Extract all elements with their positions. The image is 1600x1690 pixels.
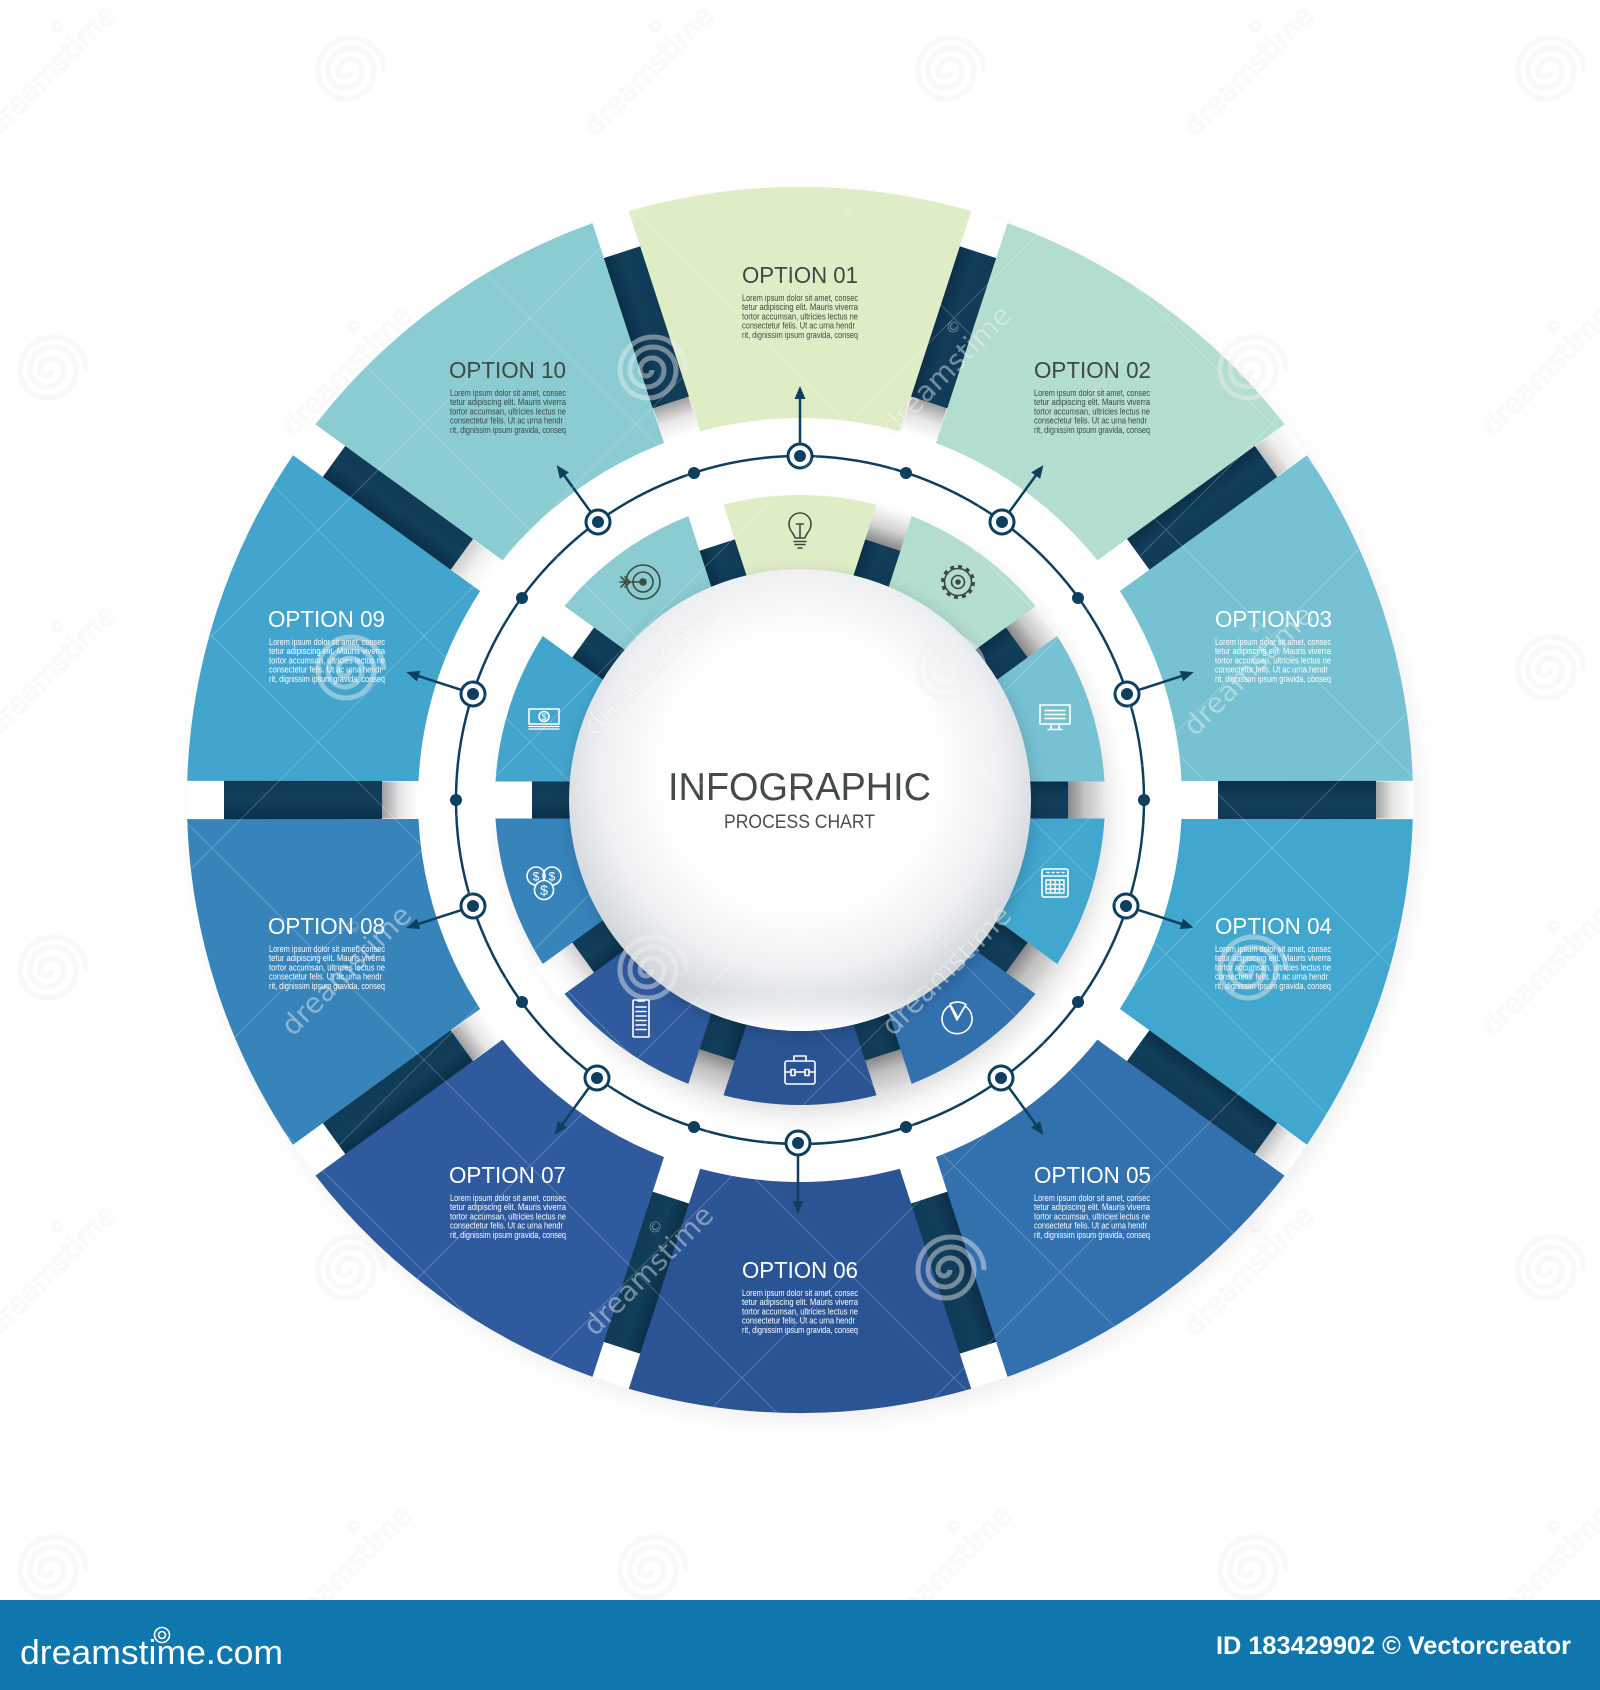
- text block: option 06: tetur adipiscing elit. Mauris viverra: [742, 1297, 859, 1307]
- watermark text: ©: [942, 316, 965, 339]
- text block: option 05: consectetur felis. Ut ac urna hendr: [1034, 1221, 1147, 1231]
- panel: option 06: [629, 1169, 971, 1413]
- text block: option 02: tortor accumsan, ultricies lectus ne: [1034, 406, 1150, 416]
- text block: option 09: tetur adipiscing elit. Mauris viverra: [269, 646, 386, 656]
- watermark text: dreamstime: [577, 1199, 720, 1342]
- watermark text: ©: [46, 16, 69, 39]
- center circle shadow: [570, 572, 1034, 1036]
- panel: option 10: [301, 203, 722, 602]
- text block: option 10: tortor accumsan, ultricies lectus ne: [450, 406, 566, 416]
- watermark text: dreamstime: [1177, 0, 1320, 142]
- text block: option 01: Lorem ipsum dolor sit amet, consec: [742, 293, 858, 303]
- footer logo text: dreamstime.com: [20, 1634, 283, 1672]
- icon: gear: [942, 566, 974, 598]
- heading: option 09: OPTION 09: [268, 606, 385, 632]
- watermark text: ©: [644, 1216, 667, 1239]
- text block: option 04: Lorem ipsum dolor sit amet, consec: [1215, 944, 1331, 954]
- heading: option 06: OPTION 06: [742, 1257, 858, 1283]
- watermark text: ©: [1542, 916, 1565, 939]
- heading: option 01: OPTION 01: [742, 262, 858, 288]
- panel: option 05: [878, 998, 1299, 1397]
- text block: option 10: [450, 388, 567, 435]
- text block: option 05: tortor accumsan, ultricies lectus ne: [1034, 1211, 1150, 1221]
- watermark lattice lines: [187, 187, 1413, 1413]
- watermark text: dreamstime: [275, 1499, 418, 1642]
- text block: option 04: [1215, 944, 1332, 991]
- text block: option 04: consectetur felis. Ut ac urna hendr: [1215, 972, 1328, 982]
- text block: option 01: rit, dignissim ipsum gravida, conseq: [742, 330, 858, 340]
- watermark text: dreamstime: [1177, 1199, 1320, 1342]
- icon: coins: $: [549, 870, 556, 884]
- center circle: [569, 569, 1031, 1031]
- icon: monitor: [1040, 705, 1070, 730]
- heading: option 10: OPTION 10: [449, 357, 566, 383]
- heading: option 02: OPTION 02: [1034, 357, 1151, 383]
- wheel soft shadow: [198, 202, 1414, 1418]
- inner ring soft shadow: [509, 515, 1105, 1111]
- text block: option 05: Lorem ipsum dolor sit amet, consec: [1034, 1193, 1150, 1203]
- text block: option 03: tortor accumsan, ultricies lectus ne: [1215, 655, 1331, 665]
- text block: option 09: tortor accumsan, ultricies lectus ne: [269, 655, 385, 665]
- heading: infographic: INFOGRAPHIC: [668, 766, 931, 809]
- watermark text: ©: [1244, 1216, 1267, 1239]
- watermark text: dreamstime: [1177, 599, 1320, 742]
- watermark text: dreamstime: [275, 899, 418, 1042]
- text block: option 07: tortor accumsan, ultricies lectus ne: [450, 1211, 566, 1221]
- heading: option 08: OPTION 08: [268, 913, 385, 939]
- text block: option 07: [450, 1193, 567, 1240]
- watermark text: ©: [342, 1516, 365, 1539]
- text block: option 04: rit, dignissim ipsum gravida, conseq: [1215, 981, 1331, 991]
- heading: option 05: OPTION 05: [1034, 1162, 1151, 1188]
- text block: option 02: Lorem ipsum dolor sit amet, consec: [1034, 388, 1150, 398]
- text block: option 03: Lorem ipsum dolor sit amet, consec: [1215, 637, 1331, 647]
- text block: option 02: consectetur felis. Ut ac urna hendr: [1034, 416, 1147, 426]
- panel: option 03: [1098, 448, 1436, 849]
- text block: option 09: rit, dignissim ipsum gravida, conseq: [269, 674, 385, 684]
- watermark text: dreamstime: [275, 299, 418, 442]
- text block: option 09: Lorem ipsum dolor sit amet, consec: [269, 637, 385, 647]
- text block: option 09: [269, 637, 386, 684]
- icon: banknote: [529, 709, 559, 729]
- text block: option 05: [1034, 1193, 1151, 1240]
- text block: option 06: tortor accumsan, ultricies lectus ne: [742, 1306, 858, 1316]
- text block: option 08: consectetur felis. Ut ac urna hendr: [269, 972, 382, 982]
- icon: target: [620, 565, 660, 599]
- large ring nodes: [461, 444, 1139, 1155]
- watermark text: ©: [342, 316, 365, 339]
- text block: option 08: tortor accumsan, ultricies lectus ne: [269, 962, 385, 972]
- text block: option 08: Lorem ipsum dolor sit amet, consec: [269, 944, 385, 954]
- text block: option 10: rit, dignissim ipsum gravida, conseq: [450, 425, 566, 435]
- watermark text: dreamstime: [875, 1499, 1018, 1642]
- text block: option 07: tetur adipiscing elit. Mauris viverra: [450, 1202, 567, 1212]
- panel: option 07: [301, 998, 722, 1397]
- text block: option 03: consectetur felis. Ut ac urna hendr: [1215, 665, 1328, 675]
- watermark text: dreamstime: [577, 599, 720, 742]
- icon: briefcase: [785, 1056, 815, 1084]
- text block: option 01: [742, 293, 859, 340]
- panel: option 02: [878, 203, 1299, 602]
- watermark text: ©: [1244, 616, 1267, 639]
- arrows from nodes to options: [405, 386, 1195, 1214]
- watermark text: ©: [644, 616, 667, 639]
- subheading: process chart: PROCESS CHART: [724, 812, 875, 833]
- text block: option 05: tetur adipiscing elit. Mauris viverra: [1034, 1202, 1151, 1212]
- text block: option 06: rit, dignissim ipsum gravida, conseq: [742, 1325, 858, 1335]
- heading: option 07: OPTION 07: [449, 1162, 566, 1188]
- text block: option 08: rit, dignissim ipsum gravida, conseq: [269, 981, 385, 991]
- text block: option 09: consectetur felis. Ut ac urna hendr: [269, 665, 382, 675]
- text block: option 08: tetur adipiscing elit. Mauris viverra: [269, 953, 386, 963]
- panel: option 04: [1098, 751, 1436, 1152]
- text block: option 04: tortor accumsan, ultricies lectus ne: [1215, 962, 1331, 972]
- text block: option 06: [742, 1288, 859, 1335]
- text block: option 03: [1215, 637, 1332, 684]
- text block: option 02: rit, dignissim ipsum gravida, conseq: [1034, 425, 1150, 435]
- text block: option 04: tetur adipiscing elit. Mauris viverra: [1215, 953, 1332, 963]
- icon: pie chart: [942, 1002, 972, 1034]
- footer bar: [0, 1600, 1600, 1690]
- text block: option 01: tortor accumsan, ultricies lectus ne: [742, 311, 858, 321]
- wheel white base: [187, 187, 1413, 1413]
- footer logo spiral: [154, 1628, 170, 1642]
- text block: option 06: Lorem ipsum dolor sit amet, consec: [742, 1288, 858, 1298]
- watermark text: ©: [342, 916, 365, 939]
- icon: light bulb: [789, 513, 811, 548]
- watermark text: ©: [1244, 16, 1267, 39]
- text block: option 10: consectetur felis. Ut ac urna hendr: [450, 416, 563, 426]
- text block: option 05: rit, dignissim ipsum gravida, conseq: [1034, 1230, 1150, 1240]
- watermark text: ©: [942, 1516, 965, 1539]
- text block: option 07: consectetur felis. Ut ac urna hendr: [450, 1221, 563, 1231]
- inner gap white covers: [488, 497, 737, 1000]
- text block: option 08: [269, 944, 386, 991]
- watermark text: ©: [1542, 316, 1565, 339]
- text block: option 03: tetur adipiscing elit. Mauris viverra: [1215, 646, 1332, 656]
- watermark text: ©: [46, 1216, 69, 1239]
- text block: option 07: Lorem ipsum dolor sit amet, consec: [450, 1193, 566, 1203]
- footer credit text: ID 183429902 © Vectorcreator: [1216, 1632, 1571, 1660]
- icon: banknote: $: [541, 712, 547, 722]
- panel: option 08: [164, 751, 502, 1152]
- text block: option 02: tetur adipiscing elit. Mauris viverra: [1034, 397, 1151, 407]
- connector ring with nodes: [450, 456, 1150, 1144]
- heading: option 03: OPTION 03: [1215, 606, 1332, 632]
- text block: option 01: consectetur felis. Ut ac urna hendr: [742, 321, 855, 331]
- icon: coins: $: [540, 882, 548, 898]
- inner ring segments: [486, 495, 1114, 1105]
- text block: option 01: tetur adipiscing elit. Mauris viverra: [742, 302, 859, 312]
- text block: option 06: consectetur felis. Ut ac urna hendr: [742, 1316, 855, 1326]
- watermark text: dreamstime: [875, 299, 1018, 442]
- icon: calendar: [1042, 869, 1068, 897]
- watermark text: ©: [1542, 1516, 1565, 1539]
- watermark text: ©: [644, 16, 667, 39]
- icon: coins: $: [533, 870, 540, 884]
- icon: phone list: [633, 1000, 649, 1037]
- panel: option 09: [164, 448, 502, 849]
- heading: option 04: OPTION 04: [1215, 913, 1332, 939]
- text block: option 10: Lorem ipsum dolor sit amet, consec: [450, 388, 566, 398]
- outer connector bars: [224, 246, 1413, 1354]
- watermark text: ©: [942, 916, 965, 939]
- watermark text: dreamstime: [577, 0, 720, 142]
- inner connector bars: [532, 504, 1105, 1096]
- text block: option 02: [1034, 388, 1151, 435]
- watermark text: dreamstime: [875, 899, 1018, 1042]
- text block: option 10: tetur adipiscing elit. Mauris viverra: [450, 397, 567, 407]
- text block: option 07: rit, dignissim ipsum gravida, conseq: [450, 1230, 566, 1240]
- text block: option 03: rit, dignissim ipsum gravida, conseq: [1215, 674, 1331, 684]
- icon: coins: [527, 867, 561, 900]
- watermark text: ©: [46, 616, 69, 639]
- panel: option 01: [629, 187, 971, 431]
